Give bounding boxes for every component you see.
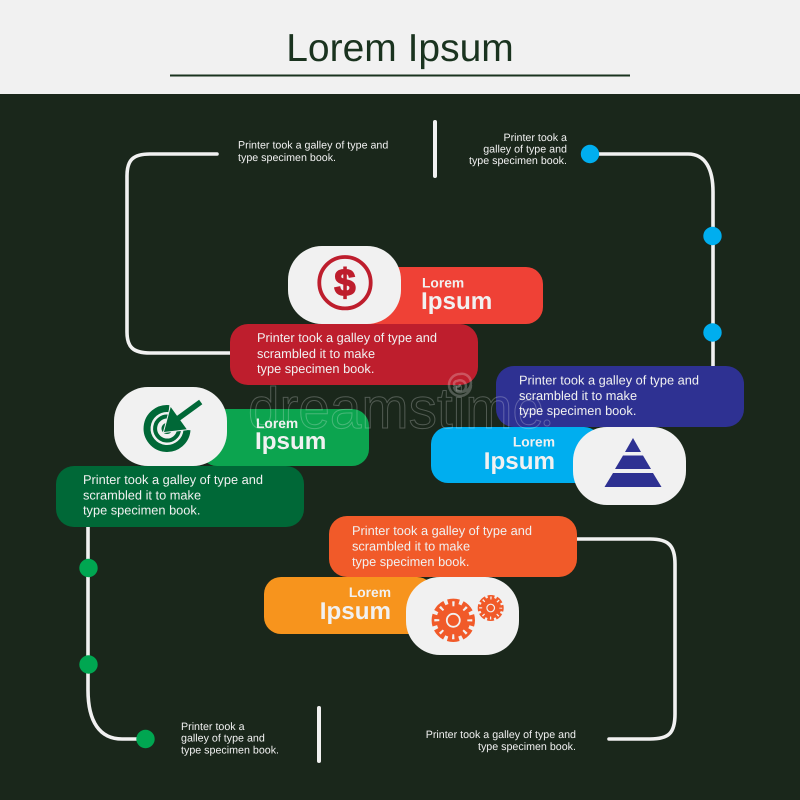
icon card: dollar: $	[334, 262, 356, 304]
panel: green target	[56, 387, 369, 527]
panel: blue pyramid	[431, 366, 744, 505]
note: top left: Printer took a galley of type and	[238, 140, 388, 152]
note: bottom left: type specimen book.	[181, 744, 279, 756]
small gear	[480, 597, 502, 619]
large gear	[435, 602, 471, 638]
connector: top left	[127, 154, 232, 353]
note: bottom left: galley of type and	[181, 732, 265, 744]
heading: green: Lorem	[256, 416, 298, 431]
heading: red: Lorem	[422, 276, 464, 290]
note: top left: type specimen book.	[238, 152, 336, 164]
heading: red	[421, 276, 492, 315]
divider: bottom	[317, 706, 321, 763]
title: Lorem Ipsum	[286, 27, 514, 70]
description: orange: scrambled it to make	[352, 538, 470, 554]
note: top right: type specimen book.	[469, 155, 567, 167]
description: orange: type specimen book.	[352, 554, 469, 569]
connector: top right	[581, 145, 722, 366]
description: blue: Printer took a galley of type and	[519, 372, 699, 388]
description: orange: Printer took a galley of type and	[352, 523, 532, 538]
note: bottom right	[426, 729, 576, 753]
heading: blue: Lorem	[513, 434, 555, 450]
heading: red: Ipsum	[421, 288, 492, 315]
header band	[0, 0, 800, 94]
description: green: type specimen book.	[83, 502, 200, 518]
description: blue: scrambled it to make	[519, 388, 637, 403]
description: red: scrambled it to make	[257, 346, 375, 361]
note: bottom right: Printer took a galley of type and	[426, 729, 576, 741]
description: red: type specimen book.	[257, 361, 374, 376]
watermark: dreamstime	[248, 376, 544, 441]
note: top right	[469, 132, 567, 167]
description: green: Printer took a galley of type and	[83, 472, 263, 487]
heading: green	[255, 416, 326, 455]
heading: orange: Ipsum	[320, 598, 391, 625]
divider: top	[433, 120, 437, 178]
heading: blue	[484, 434, 555, 475]
note: bottom left: Printer took a	[181, 721, 245, 733]
heading: green: Ipsum	[255, 428, 326, 455]
description: red: Printer took a galley of type and	[257, 330, 437, 345]
note: top right: Printer took a	[503, 132, 567, 144]
note: top left	[238, 140, 388, 164]
icon card: gears	[406, 577, 519, 655]
panel: orange gears	[264, 516, 577, 655]
note: bottom right: type specimen book.	[478, 741, 576, 753]
description: orange	[352, 523, 532, 569]
connector: bottom left	[79, 527, 155, 748]
heading: blue: Ipsum	[484, 448, 555, 475]
heading: orange	[320, 585, 391, 625]
description: red	[257, 330, 437, 376]
panel: red finance	[230, 246, 543, 385]
description: green	[83, 472, 263, 518]
icon card: target	[114, 387, 227, 466]
note: bottom left	[181, 721, 279, 756]
description: blue: type specimen book.	[519, 403, 636, 418]
description: green: scrambled it to make	[83, 488, 201, 502]
heading: orange: Lorem	[349, 585, 391, 600]
connector: bottom right	[575, 539, 675, 739]
icon card: pyramid	[573, 427, 686, 505]
icon card: dollar	[288, 246, 401, 324]
note: top right: galley of type and	[483, 144, 567, 156]
description: blue	[519, 372, 699, 418]
